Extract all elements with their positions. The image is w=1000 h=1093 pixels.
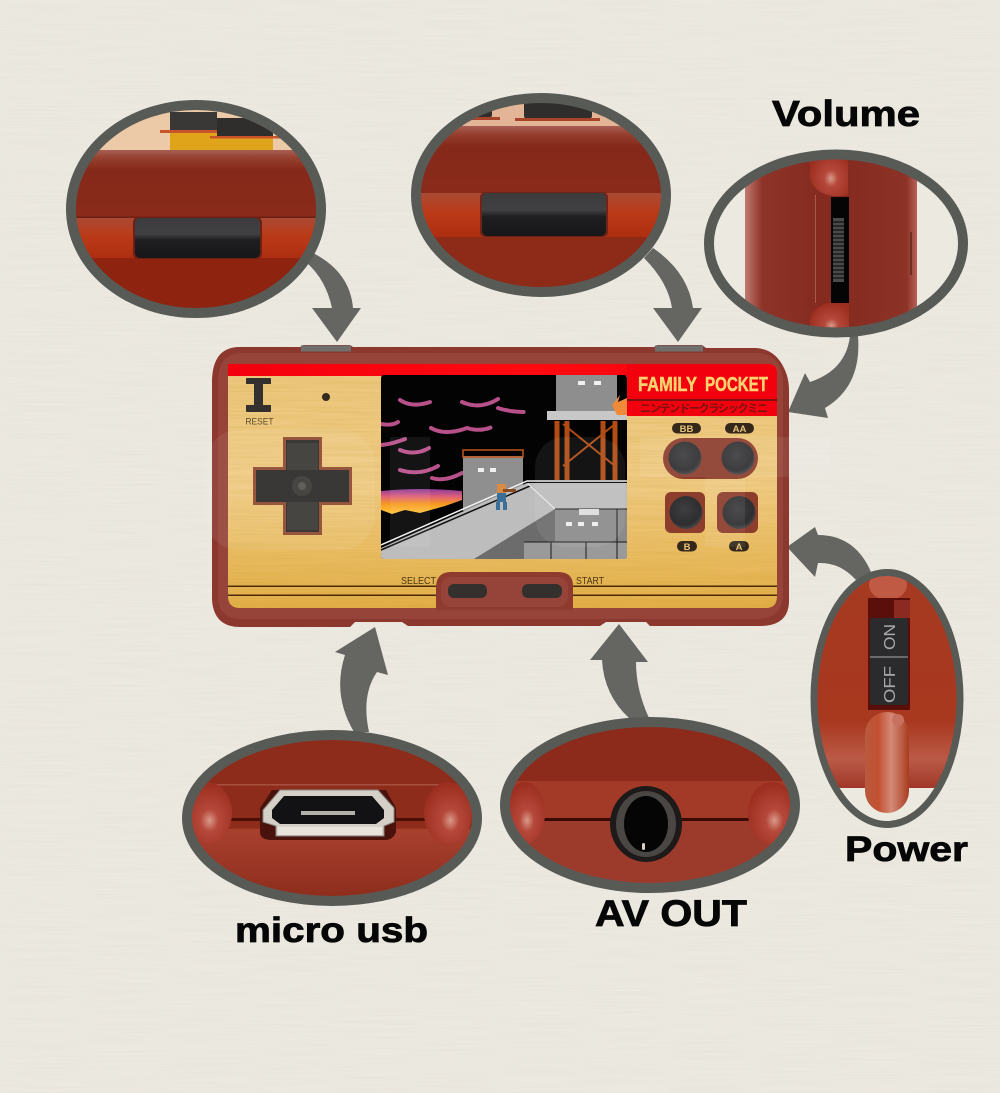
arrow: power xyxy=(787,527,871,580)
explosion enemy xyxy=(612,395,627,415)
console body shell xyxy=(212,345,789,627)
AA label xyxy=(725,423,754,435)
callout: power switch detail: ON xyxy=(882,624,899,650)
callout: power switch detail xyxy=(805,565,970,824)
top shoulder buttons xyxy=(301,346,351,352)
bottom stripes xyxy=(228,586,777,587)
sunset band xyxy=(381,489,462,514)
handheld console xyxy=(205,345,830,627)
B label: B xyxy=(684,542,691,553)
select/start bump xyxy=(436,572,573,610)
lower blocks xyxy=(555,509,627,559)
arrow: left shoulder button xyxy=(307,253,361,342)
arrow: micro usb xyxy=(335,627,388,732)
callout: power switch detail: OFF xyxy=(882,666,899,703)
arrow: right shoulder button xyxy=(644,248,702,342)
logo: family pocket xyxy=(638,374,768,396)
ground xyxy=(381,483,627,559)
arrow: AV out xyxy=(590,624,649,718)
console face xyxy=(228,364,777,608)
label: Power: Power xyxy=(845,830,968,869)
callout: left shoulder button detail xyxy=(60,95,340,318)
tower xyxy=(556,375,617,412)
start label: START xyxy=(576,576,604,587)
hero sprite xyxy=(496,484,516,510)
B label xyxy=(677,541,697,553)
clouds xyxy=(381,399,525,479)
AA label: AA xyxy=(733,424,746,435)
logo: family pocket: FAMILY xyxy=(638,374,698,396)
power indicator dot xyxy=(322,393,330,401)
select button xyxy=(448,584,487,598)
callout: AV out jack detail xyxy=(498,716,803,894)
select label: SELECT xyxy=(401,576,436,587)
A label: A xyxy=(736,542,743,553)
BB label: BB xyxy=(680,424,693,435)
reset button xyxy=(246,378,271,412)
label: Volume: Volume xyxy=(772,93,920,134)
logo: family pocket: POCKET xyxy=(705,374,768,396)
arrow: volume xyxy=(788,336,858,418)
logo: japanese subtitle: ニンテンドークラシックミニ xyxy=(640,400,768,416)
BB label xyxy=(672,423,701,435)
game screen xyxy=(381,375,627,559)
d-pad xyxy=(253,437,352,535)
reset label: RESET xyxy=(246,416,274,428)
callout: micro usb port detail xyxy=(180,730,485,908)
button backing xyxy=(663,438,758,479)
callout: right shoulder button detail xyxy=(410,90,680,297)
A label xyxy=(729,541,749,553)
callout: volume wheel detail xyxy=(709,145,963,340)
logo red panel xyxy=(627,364,777,416)
label: AV OUT: AV OUT xyxy=(595,893,747,934)
start button xyxy=(522,584,562,598)
label: micro usb: micro usb xyxy=(235,911,428,950)
building left xyxy=(463,456,523,511)
scaffold xyxy=(557,421,615,480)
action buttons xyxy=(668,442,756,529)
faint watermark overlay xyxy=(205,430,830,550)
